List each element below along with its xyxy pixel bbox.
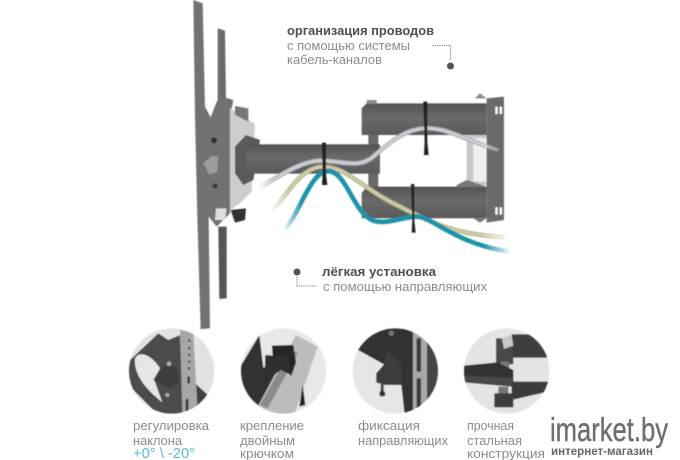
caption: guide fixing: фиксация <box>358 418 420 433</box>
cable ties <box>322 102 429 233</box>
plate fittings <box>203 106 260 223</box>
rear TV rail <box>218 28 227 299</box>
caption: double hook mount <box>240 418 304 460</box>
heading: easy installation: лёгкая установка <box>322 264 437 279</box>
caption: steel construction: стальная <box>467 433 522 448</box>
wall plate <box>457 93 504 223</box>
callout: easy installation <box>294 264 487 294</box>
detail photo: tilt adjustment <box>128 328 216 415</box>
caption: double hook mount: крепление <box>240 418 304 433</box>
wall mount bracket illustration <box>193 0 509 329</box>
swivel arms <box>246 100 487 218</box>
callout leader: cable management <box>433 46 454 70</box>
detail photo: double hook <box>239 328 329 415</box>
cables <box>260 128 509 252</box>
front TV plate <box>193 0 233 329</box>
light adapter plate <box>230 108 255 211</box>
caption: tilt adjustment <box>133 418 210 460</box>
caption: guide fixing <box>358 418 448 448</box>
detail photo: steel construction <box>463 328 551 415</box>
caption: tilt adjustment: регулировка <box>133 418 210 433</box>
callout leader: easy installation <box>294 268 317 286</box>
caption: steel construction <box>467 418 545 460</box>
text: cable channel system: с помощью системы <box>287 38 410 53</box>
text: cable channel system <box>287 38 410 67</box>
caption: double hook mount: двойным <box>240 433 295 448</box>
callout: cable management <box>287 23 454 70</box>
detail photo: guide fixing <box>351 328 442 415</box>
text: using guides: с помощью направляющих <box>323 279 487 294</box>
caption: guide fixing: направляющих <box>358 433 448 448</box>
heading: cable management: организация проводов <box>287 23 434 38</box>
logo: imarket.by: интернет-магазин <box>551 446 653 458</box>
text: cable channel system: кабель-каналов <box>287 52 382 67</box>
caption: tilt adjustment: наклона <box>133 433 183 448</box>
caption: steel construction: прочная <box>467 418 514 433</box>
